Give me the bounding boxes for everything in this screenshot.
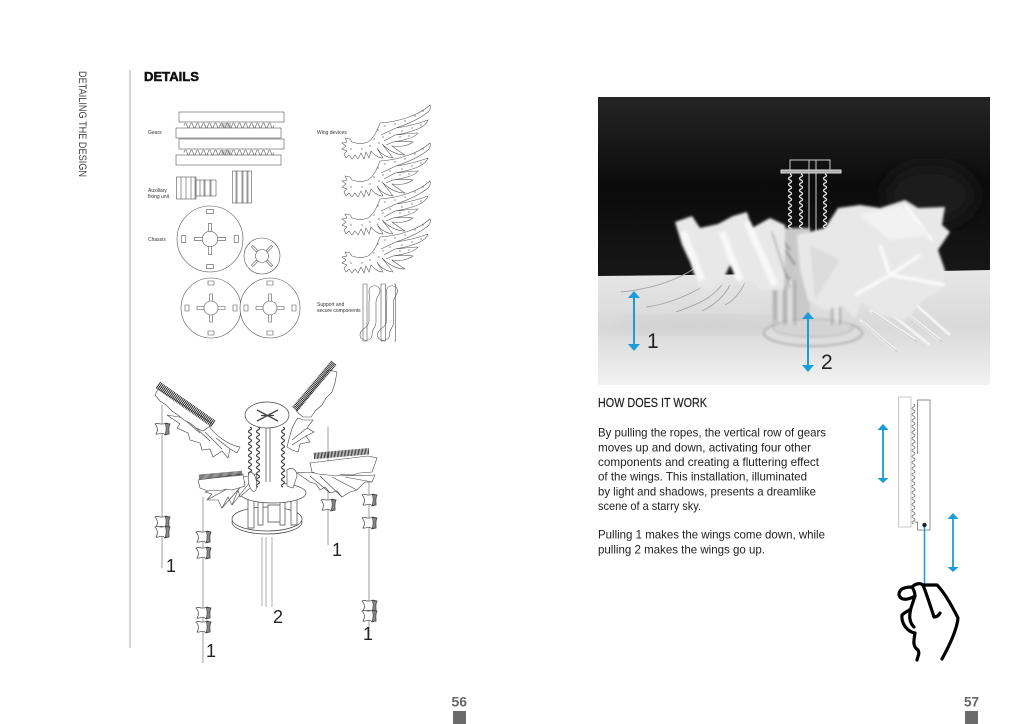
column: [245, 402, 289, 487]
component labels: Chassis: [148, 237, 166, 243]
left rack: [898, 397, 911, 527]
explanatory text: moves up and down, activating four other: [598, 441, 811, 454]
table: [598, 270, 990, 385]
panel: component drawings: [148, 105, 430, 341]
component labels: Auxiliary: [148, 188, 167, 194]
white left wing: [675, 212, 790, 290]
page number 57: [964, 694, 979, 724]
component labels: Wing devices: [317, 130, 347, 136]
page number 56: [452, 694, 467, 724]
photo numbers: [647, 330, 833, 374]
gears: [176, 112, 284, 165]
component labels: [148, 130, 361, 314]
white right wing: [797, 200, 950, 320]
rope numbers: 1: [332, 540, 342, 560]
mechanism diagram: [878, 397, 958, 660]
support components: [360, 284, 398, 341]
component labels: fixing unit: [148, 194, 170, 200]
photo numbers: 1: [647, 330, 659, 353]
rope numbers: 1: [363, 624, 373, 644]
isometric assembly drawing: [155, 362, 377, 663]
panel: photograph: [598, 97, 990, 385]
rope and pull point: [924, 525, 926, 586]
wings: [155, 362, 377, 508]
explanatory text: of the wings. This installation, illuminated: [598, 471, 807, 484]
lower left wing: [205, 474, 257, 508]
heading: details: DETAILS: [144, 69, 199, 84]
upper left wing: [167, 415, 240, 458]
vertical rule: [130, 70, 131, 648]
clear wing feathers: [621, 268, 950, 352]
page number 56: 56: [452, 694, 467, 710]
photo numbers: 2: [821, 351, 833, 374]
explanatory text: components and creating a fluttering effect: [598, 456, 820, 469]
rope numbers: 2: [273, 607, 283, 627]
explanatory text: Pulling 1 makes the wings come down, while: [598, 529, 825, 542]
component labels: secure components: [317, 308, 361, 314]
base: [232, 483, 306, 534]
explanatory text: By pulling the ropes, the vertical row of gears: [598, 427, 826, 440]
motion arrows: [878, 424, 958, 572]
component labels: Support and: [317, 302, 344, 308]
upper right wing: [287, 418, 314, 452]
rope numbers: 1: [206, 641, 216, 661]
explanatory text: [598, 427, 826, 556]
ropes: [162, 405, 369, 663]
acrylic centre and base: [764, 228, 862, 346]
arrows in photograph: [628, 291, 814, 372]
acrylic column: [781, 160, 841, 236]
rope clips: [155, 423, 377, 633]
explanatory text: pulling 2 makes the wings go up.: [598, 543, 765, 556]
icon: hand: [899, 584, 958, 660]
right rack: [914, 400, 930, 530]
auxiliary fixing unit: [176, 171, 252, 203]
explanatory text: scene of a starry sky.: [598, 500, 701, 513]
rope numbers: 1: [166, 556, 176, 576]
component labels: Gears: [148, 130, 162, 136]
wing devices: [342, 105, 430, 273]
lower right wing: [297, 472, 375, 497]
page number 57: 57: [964, 694, 979, 710]
vertical section label: DETAILING THE DESIGN: [76, 71, 88, 177]
explanatory text: by light and shadows, presents a dreamlike: [598, 485, 816, 498]
gear teeth: [912, 404, 915, 524]
chassis discs: [177, 206, 243, 272]
heading: how does it work: HOW DOES IT WORK: [598, 396, 708, 410]
rope numbers: [166, 540, 373, 661]
